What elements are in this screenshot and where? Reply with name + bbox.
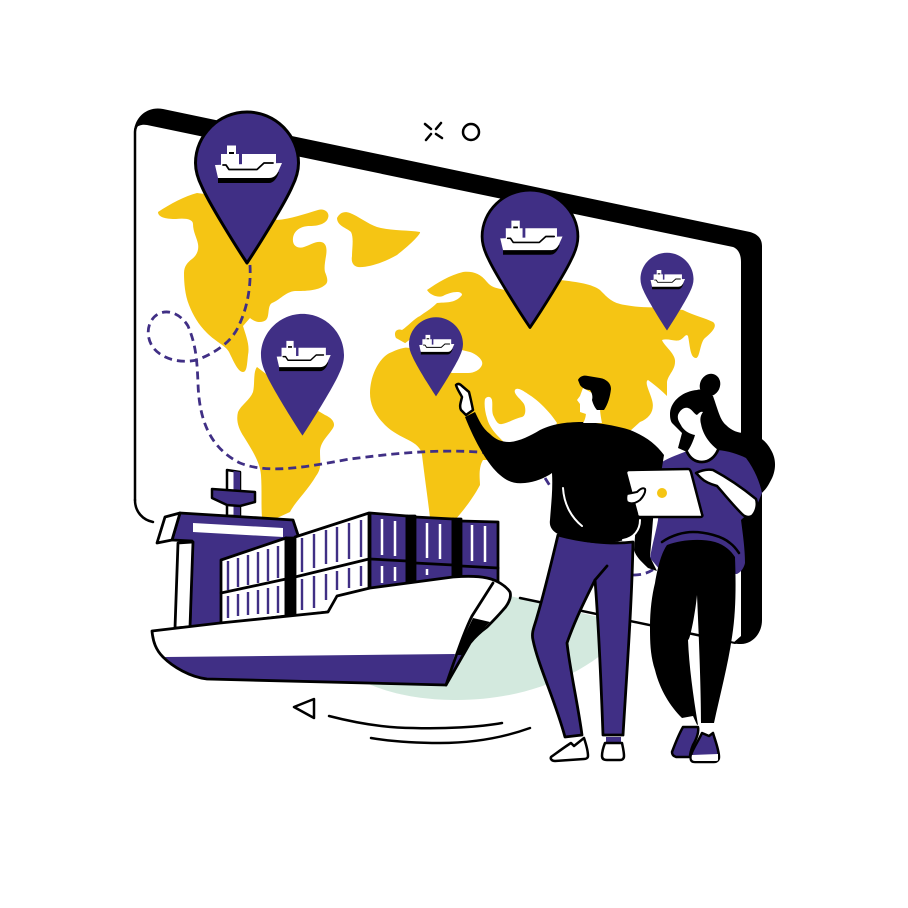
sea: Mediterranean bbox=[400, 338, 482, 373]
container ship bbox=[152, 470, 510, 685]
direction arrow bbox=[294, 699, 314, 718]
shirt hem line bbox=[662, 532, 739, 553]
woman right shoe bbox=[691, 733, 719, 762]
woman shirt bbox=[650, 450, 762, 574]
man bbox=[456, 376, 664, 761]
man sweater bbox=[465, 412, 664, 543]
dashed shipping route bbox=[148, 265, 654, 575]
man sock bbox=[606, 737, 621, 743]
continent: Greenland bbox=[337, 212, 420, 267]
woman ankles bbox=[682, 716, 713, 735]
sweater creases bbox=[563, 488, 640, 540]
tablet camera dot bbox=[657, 488, 667, 498]
hull bbox=[152, 576, 510, 685]
man left shoe bbox=[551, 738, 588, 761]
screen outline and frame bbox=[134, 108, 762, 644]
map pin: Asia large bbox=[482, 190, 578, 328]
woman hair bbox=[670, 370, 775, 498]
woman neck and face bbox=[678, 408, 718, 461]
man right shoe bbox=[602, 743, 624, 760]
man hair bbox=[578, 376, 611, 410]
continent: North America bbox=[158, 193, 328, 372]
man pointing hand bbox=[456, 384, 473, 415]
map pin: North America bbox=[196, 112, 298, 263]
decorative circle bbox=[463, 124, 479, 140]
mint ground blob bbox=[360, 596, 632, 700]
continent: South America bbox=[237, 367, 334, 518]
woman left shoe bbox=[672, 727, 698, 757]
purple containers bbox=[370, 513, 498, 590]
tablet bbox=[626, 469, 757, 517]
woman collar bbox=[687, 450, 718, 462]
man's hand on tablet bbox=[626, 488, 645, 503]
map pin: East Asia bbox=[640, 253, 694, 330]
man trousers bbox=[532, 535, 633, 737]
woman trousers bbox=[650, 540, 736, 725]
wake lines bbox=[329, 716, 530, 743]
decorative sparkle bbox=[425, 123, 442, 140]
man rear arm bbox=[634, 470, 657, 571]
man neck bbox=[583, 408, 602, 423]
map pin: South America bbox=[261, 314, 344, 436]
continent: Eurasia and Africa bbox=[370, 272, 715, 520]
world map bbox=[158, 193, 715, 520]
bridge tower bbox=[157, 513, 298, 628]
man face bbox=[577, 388, 598, 414]
mast bbox=[212, 470, 255, 516]
white containers rear bbox=[221, 538, 295, 624]
woman bbox=[650, 370, 775, 762]
sea: Indian Ocean bbox=[485, 389, 557, 445]
sole strip bbox=[692, 754, 718, 761]
map pin: Africa bbox=[409, 317, 463, 396]
woman's arm bbox=[696, 470, 757, 517]
white containers front bbox=[295, 513, 369, 616]
crotch fold bbox=[595, 566, 607, 580]
